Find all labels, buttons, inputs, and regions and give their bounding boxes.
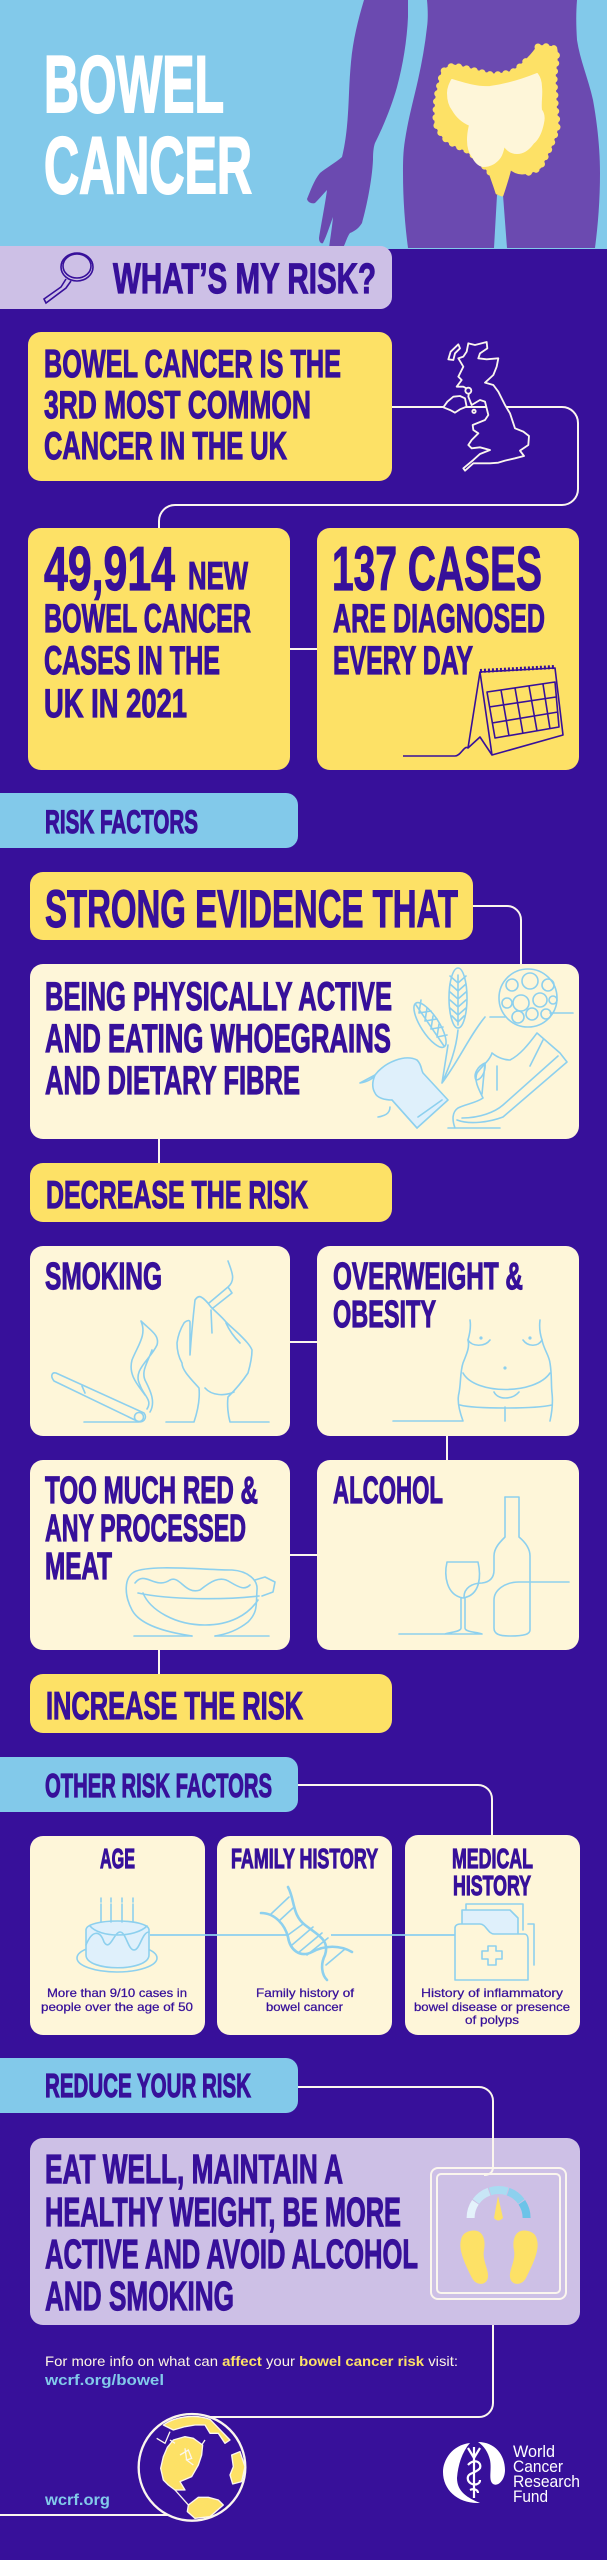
panel: smoking — [30, 1246, 290, 1436]
icon: medical folder — [455, 1904, 534, 1980]
panel: increase the risk: INCREASE THE RISK — [46, 1685, 303, 1728]
title: BOWEL — [44, 40, 224, 130]
panel: 3rd most common: CANCER IN THE UK — [44, 425, 287, 468]
connector line: other risk factors — [298, 1785, 492, 1836]
connector line: other factors icons — [150, 1934, 455, 1936]
panel: alcohol: ALCOHOL — [333, 1470, 443, 1512]
logo: World Cancer Research Fund: Cancer — [513, 2457, 563, 2476]
panel: 137 cases a day: EVERY DAY — [333, 639, 473, 683]
panel: age: people over the age of 50 — [41, 2000, 193, 2014]
panel: overweight and obesity — [317, 1246, 579, 1436]
more info text: For more info on what can affect your bowel cancer risk visit: — [45, 2353, 458, 2369]
panel: other risk factors band — [0, 1757, 298, 1812]
logo: World Cancer Research Fund: Research — [513, 2472, 580, 2491]
panel: medical history: MEDICAL — [452, 1843, 533, 1874]
connector line: reduce your risk to globe — [0, 2087, 493, 2515]
panel: family history: Family history of — [256, 1986, 355, 2000]
more info text — [44, 2353, 458, 2389]
small intestine — [448, 74, 544, 166]
icon: cigarette and hand — [52, 1261, 269, 1422]
panel: eat well advice: EAT WELL, MAINTAIN A — [45, 2146, 343, 2192]
panel: 49,914 new cases — [28, 528, 290, 770]
panel: physically active: BEING PHYSICALLY ACTIVE — [45, 975, 392, 1019]
icon: hot dog — [126, 1568, 275, 1636]
panel: medical history — [405, 1835, 580, 2035]
panel: eat well advice: AND SMOKING — [45, 2273, 234, 2319]
panel: overweight and obesity: OBESITY — [333, 1294, 436, 1336]
panel: other risk factors band: OTHER RISK FACTORS — [45, 1767, 272, 1804]
panel: 3rd most common — [28, 332, 392, 481]
panel: physically active: AND EATING WHOEGRAINS — [45, 1017, 391, 1061]
panel: increase the risk — [30, 1674, 392, 1733]
icon: UK map — [443, 342, 529, 471]
logo: World Cancer Research Fund: World — [513, 2442, 555, 2461]
icon: globe — [139, 2414, 245, 2521]
panel: medical history: HISTORY — [453, 1870, 531, 1901]
icon: food and shoe — [360, 968, 573, 1128]
panel: eat well advice — [30, 2138, 580, 2325]
connector lines: evidence — [159, 906, 521, 1674]
panel: 49,914 new cases: BOWEL CANCER — [44, 597, 251, 641]
icon: birthday cake — [77, 1898, 157, 1972]
panel: smoking: SMOKING — [45, 1256, 162, 1298]
panel: age: More than 9/10 cases in — [47, 1986, 187, 2000]
panel: eat well advice: HEALTHY WEIGHT, BE MORE — [45, 2189, 401, 2235]
title — [44, 40, 252, 211]
panel: age — [30, 1836, 205, 2035]
colon — [436, 47, 557, 195]
figure silhouette — [307, 0, 600, 248]
icon: weighing scale — [431, 2168, 566, 2299]
panel: risk factors band: RISK FACTORS — [45, 804, 198, 840]
icon: calendar — [403, 667, 563, 756]
panel: 49,914 new cases: CASES IN THE — [44, 639, 220, 683]
panel: age: AGE — [100, 1843, 135, 1874]
panel: red and processed meat: ANY PROCESSED — [45, 1508, 246, 1550]
panel: red and processed meat — [30, 1460, 290, 1650]
panel: red and processed meat: MEAT — [45, 1546, 112, 1588]
panel: family history — [217, 1836, 392, 2035]
panel: what's my risk heading — [0, 246, 392, 309]
panel: risk factors band — [0, 793, 298, 848]
panel: 3rd most common: BOWEL CANCER IS THE — [44, 343, 341, 386]
icon: wine bottle and glass — [399, 1497, 569, 1636]
icon: torso — [393, 1320, 552, 1421]
panel: decrease the risk: DECREASE THE RISK — [46, 1174, 308, 1217]
panel: reduce your risk band — [0, 2058, 298, 2113]
panel: physically active: AND DIETARY FIBRE — [45, 1059, 300, 1103]
more info text: wcrf.org/bowel — [44, 2372, 164, 2389]
panel: alcohol — [317, 1460, 579, 1650]
panel: 49,914 new cases: UK IN 2021 — [44, 682, 187, 726]
panel: decrease the risk — [30, 1163, 392, 1222]
panel: family history: FAMILY HISTORY — [231, 1843, 378, 1874]
logo: World Cancer Research Fund: Fund — [513, 2487, 548, 2506]
panel: medical history: bowel disease or presence — [414, 2000, 570, 2014]
panel: 3rd most common: 3RD MOST COMMON — [44, 384, 311, 427]
panel: reduce your risk band: REDUCE YOUR RISK — [45, 2067, 251, 2104]
icon: magnifying glass — [44, 253, 93, 303]
panel: medical history: History of inflammatory — [421, 1986, 563, 2000]
panel: 137 cases a day — [317, 528, 579, 770]
website link: wcrf.org — [44, 2492, 110, 2509]
connector lines: UK fact to stats — [159, 407, 578, 649]
logo: World Cancer Research Fund — [443, 2442, 580, 2506]
icon: dna helix — [261, 1887, 352, 1980]
panel: strong evidence — [30, 872, 473, 940]
panel: medical history: of polyps — [465, 2013, 519, 2027]
panel: physically active — [30, 964, 579, 1139]
header banner — [0, 0, 607, 249]
panel: 49,914 new cases: 49,914 — [44, 535, 175, 604]
panel: 49,914 new cases: NEW — [188, 555, 248, 598]
panel: what's my risk heading: WHAT’S MY RISK? — [113, 255, 376, 303]
panel: red and processed meat: TOO MUCH RED & — [45, 1470, 258, 1512]
title: CANCER — [44, 121, 252, 211]
panel: family history: bowel cancer — [266, 2000, 343, 2014]
